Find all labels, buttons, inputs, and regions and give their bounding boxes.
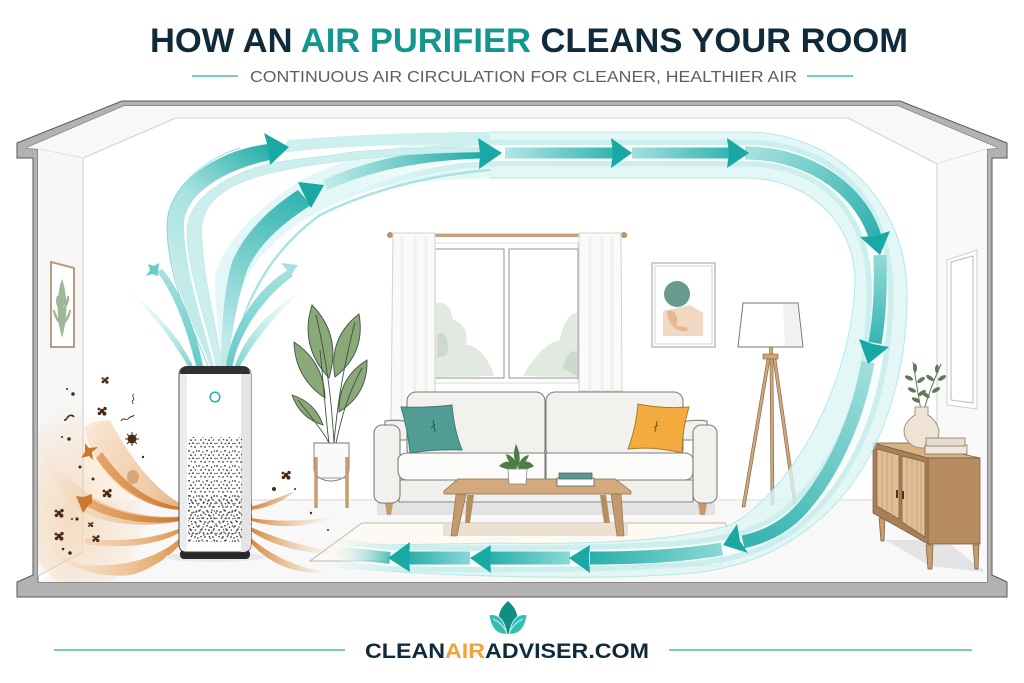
orange pillow [628, 404, 689, 453]
title: HOW AN AIR PURIFIER CLEANS YOUR ROOM [150, 22, 908, 60]
cabinet [873, 443, 985, 572]
subtitle: CONTINUOUS AIR CIRCULATION FOR CLEANER, HEALTHIER AIR [250, 69, 797, 86]
small table plant [499, 444, 534, 484]
footer brand: CLEAN AIRADVISER.COM [365, 640, 649, 663]
books on cabinet [925, 438, 967, 454]
arrowheads [264, 133, 890, 573]
sofa [374, 392, 717, 515]
curtains and rod [387, 232, 627, 420]
air purifier [165, 366, 265, 562]
logo leaves [489, 601, 527, 634]
airflow band A, rising left [167, 132, 490, 366]
footer rule right [669, 649, 972, 651]
main airflow band [325, 132, 907, 577]
orange arrow stars [76, 443, 139, 513]
orange intake streams left [45, 420, 186, 576]
teal pillow [401, 405, 462, 453]
books on table [557, 473, 594, 486]
room shell [17, 101, 1007, 597]
right wall window [947, 250, 977, 409]
left wall art [51, 262, 74, 347]
center wall art [652, 263, 715, 347]
orange intake streams right [246, 491, 340, 573]
footer rule left [54, 649, 345, 651]
potted plant [292, 305, 367, 508]
vase with branches [904, 362, 947, 448]
airflow band B, rising right [215, 132, 492, 366]
clean air fan above purifier [125, 263, 302, 366]
rug [310, 523, 730, 566]
dust particles [55, 377, 329, 555]
floor lamp [738, 303, 803, 507]
window [435, 243, 578, 383]
orange haze of dirty air [38, 416, 142, 582]
coffee table [443, 479, 631, 536]
core of band B above the sofa wall [325, 153, 480, 185]
